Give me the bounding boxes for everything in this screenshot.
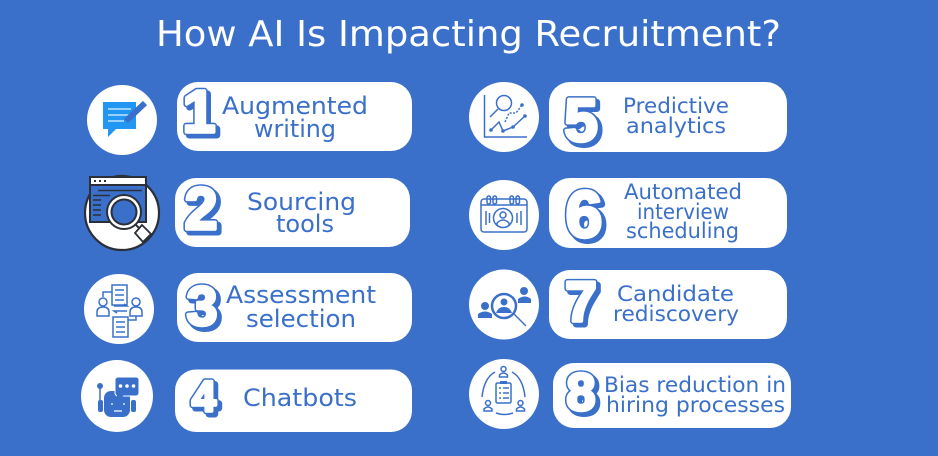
label 7: Candidate [617, 282, 734, 306]
pill 1 [177, 82, 412, 151]
label 7: rediscovery [613, 302, 739, 326]
number 1: 1 [183, 79, 215, 145]
number 8: 8 [567, 364, 595, 422]
label 1 [222, 92, 368, 143]
icon: clipboard surrounded by people [469, 359, 539, 429]
number 4: 4 [195, 376, 219, 424]
item 2: sourcing tools [85, 176, 410, 250]
label 7 [613, 282, 739, 326]
number 1: 1 [186, 82, 218, 148]
label 6: interview [637, 200, 729, 224]
label 5: Predictive [623, 94, 729, 118]
pill 5 [549, 82, 787, 152]
item 6: automated interview scheduling [469, 177, 787, 254]
number 6: 6 [566, 177, 602, 251]
item 1: augmented writing [87, 79, 412, 155]
pill 8 [553, 363, 791, 428]
pill 2 [175, 178, 410, 247]
number 6: 6 [566, 177, 602, 251]
icon: magnifier over candidates [469, 270, 539, 340]
item 4: chatbots [81, 360, 412, 432]
number 7: 7 [565, 270, 597, 334]
label 4: Chatbots [243, 384, 357, 412]
item 8: bias reduction [469, 359, 791, 429]
label 2: Sourcing [247, 188, 356, 216]
label 2: tools [276, 210, 334, 238]
label 6: Automated [624, 180, 742, 204]
number 5: 5 [567, 90, 601, 157]
title: How AI Is Impacting Recruitment? [156, 14, 781, 55]
number 2: 2 [185, 176, 217, 242]
icon: chat bubble with pencil [87, 85, 157, 155]
icon: robot with speech bubble [81, 360, 153, 432]
pill 4 [175, 370, 412, 432]
icon: two people exchanging checklists [84, 274, 154, 344]
number 1: 1 [183, 79, 215, 145]
label 6 [624, 180, 742, 243]
pill 3 [177, 273, 412, 342]
number 4: 4 [192, 373, 216, 421]
label 8: hiring processes [606, 393, 785, 417]
number 4: 4 [192, 373, 216, 421]
number 7: 7 [565, 270, 597, 334]
number 3: 3 [190, 278, 220, 340]
label 3 [226, 281, 376, 333]
label 3: Assessment [226, 281, 376, 309]
label 8: Bias reduction in [604, 373, 786, 397]
item 7: candidate rediscovery [469, 270, 787, 340]
number 2: 2 [188, 179, 220, 245]
number 6: 6 [569, 180, 605, 254]
label 6: scheduling [626, 219, 739, 243]
label 1: writing [254, 115, 336, 143]
number 8: 8 [567, 364, 595, 422]
item 5: predictive analytics [469, 82, 787, 157]
label 5 [623, 94, 729, 138]
number 8: 8 [570, 367, 598, 425]
icon: browser window with magnifier [85, 176, 159, 250]
number 5: 5 [564, 87, 598, 154]
icon: chart with magnifier [469, 82, 539, 152]
icon: calendar with person [469, 180, 539, 250]
pill 6 [549, 178, 787, 248]
pill 7 [549, 270, 787, 339]
label 3: selection [246, 305, 356, 333]
label 2 [247, 188, 356, 238]
label 8 [604, 373, 786, 417]
item 3: assessment selection [84, 273, 412, 344]
number 2: 2 [185, 176, 217, 242]
number 7: 7 [568, 273, 600, 337]
label 5: analytics [626, 114, 726, 138]
number 3: 3 [187, 275, 217, 337]
number 3: 3 [187, 275, 217, 337]
number 5: 5 [564, 87, 598, 154]
label 1: Augmented [222, 92, 368, 120]
